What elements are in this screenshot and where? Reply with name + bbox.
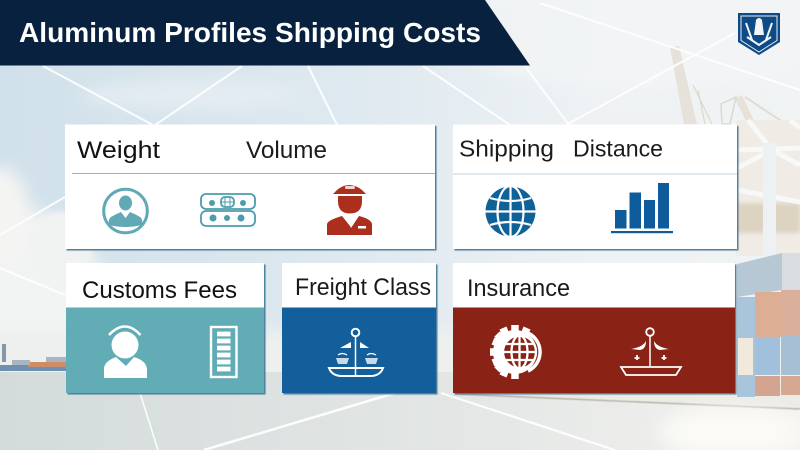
panel: freight class <box>282 263 436 393</box>
panel: customs fees <box>66 263 264 393</box>
icon: globe <box>485 186 536 237</box>
heading: distance: Distance <box>573 136 663 162</box>
icon: person in circle <box>104 189 147 233</box>
icon: customs agent <box>104 326 147 378</box>
panel: weight and volume <box>65 124 435 249</box>
crane structure <box>736 120 800 256</box>
heading: volume: Volume <box>246 137 327 164</box>
heading: shipping: Shipping <box>459 136 554 162</box>
heading: customs fees: Customs Fees <box>82 277 237 304</box>
heading: freight class: Freight Class <box>295 274 431 301</box>
title: Aluminum Profiles Shipping Costs <box>19 17 481 48</box>
icon: officer <box>327 185 372 235</box>
sea <box>0 372 800 450</box>
heading: insurance: Insurance <box>467 275 570 302</box>
icon: balance scale <box>621 328 681 375</box>
icon: bar chart <box>611 183 673 233</box>
crane masts <box>670 46 697 124</box>
ship <box>0 365 66 371</box>
icon: document stack <box>211 327 236 377</box>
heading: weight: Weight <box>77 137 160 164</box>
icon: crest logo <box>738 13 780 55</box>
icon: server racks <box>201 194 255 226</box>
panel: shipping distance <box>453 124 737 249</box>
title banner <box>0 0 530 66</box>
icon: gear globe <box>490 325 540 379</box>
clouds <box>0 210 105 390</box>
icon: balance scale <box>329 329 383 376</box>
containers <box>737 253 800 397</box>
panel: insurance <box>453 263 735 393</box>
